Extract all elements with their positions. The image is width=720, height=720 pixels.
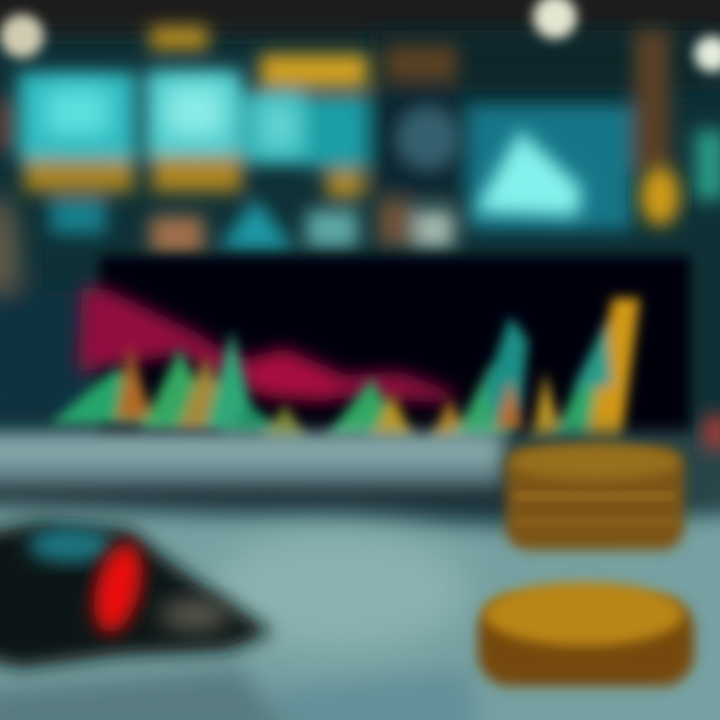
screen: third cyan bbox=[244, 92, 306, 164]
coin: lower gold disc bbox=[478, 582, 694, 686]
ceiling lights bbox=[0, 0, 720, 72]
desk: monitor base band bbox=[0, 432, 720, 508]
upper screens wall bbox=[0, 26, 720, 254]
chart: green and orange mountains bbox=[50, 298, 640, 450]
mouse: dark object with red light bbox=[0, 522, 272, 668]
right post bbox=[634, 30, 670, 170]
bright triangle on right screen bbox=[474, 130, 582, 216]
yellow lower bars bbox=[24, 160, 134, 192]
desk: lower surface bbox=[0, 504, 720, 720]
coin: upper gold stack bbox=[506, 444, 684, 550]
screen highlights bbox=[45, 85, 296, 148]
screen: second cyan bbox=[146, 70, 242, 162]
accent: right edge red glow bbox=[702, 412, 720, 452]
screen: left cyan bbox=[18, 72, 136, 162]
panel: dark chart monitor bbox=[100, 256, 690, 441]
amber lamp on post bbox=[640, 166, 680, 226]
central dark monitor bbox=[374, 88, 462, 192]
far right edge bbox=[695, 130, 720, 200]
lower small panels bbox=[50, 198, 106, 234]
right blue screen bbox=[468, 105, 632, 230]
left edge blur bbox=[0, 195, 90, 420]
yellow header bars bbox=[150, 26, 208, 50]
chart: red area bbox=[78, 286, 455, 402]
